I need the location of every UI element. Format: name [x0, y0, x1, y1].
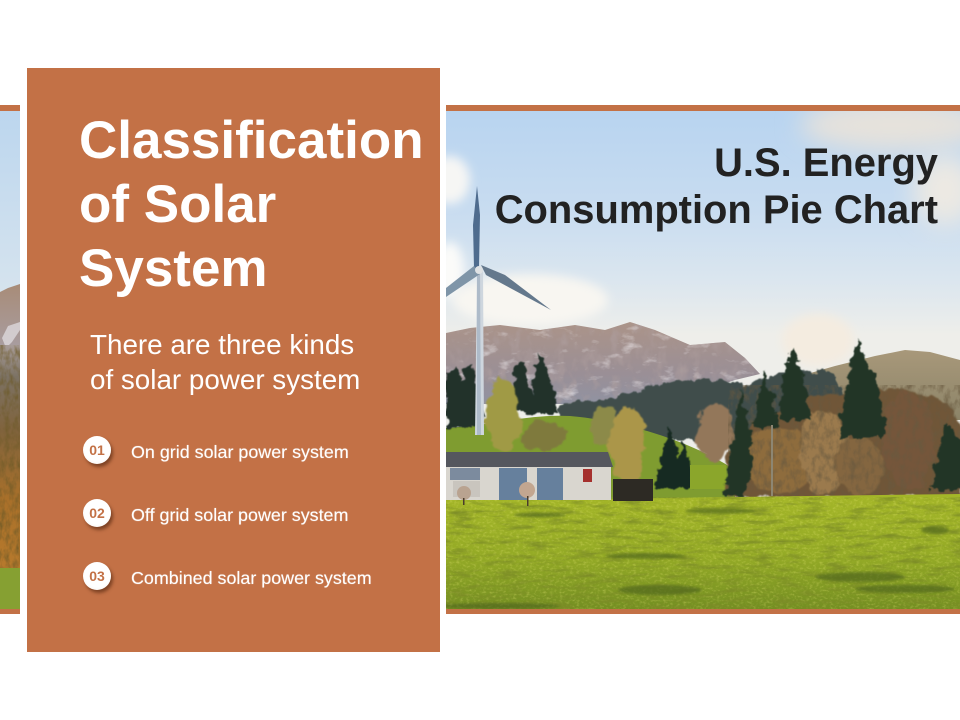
- panel: classification of solar system: [27, 68, 440, 652]
- label 03: Combined solar power system: [131, 568, 372, 588]
- heading: classification of solar system: of Solar: [79, 175, 276, 234]
- snowy mountains: [446, 322, 760, 404]
- green meadow hill: [446, 416, 735, 500]
- left photo strip: [0, 105, 20, 614]
- house: [446, 452, 613, 506]
- title: U.S. energy consumption pie chart: [495, 141, 938, 232]
- heading: classification of solar system: Classification: [79, 111, 424, 170]
- dark conifer cluster: [654, 427, 696, 488]
- light meadow patch: [690, 465, 726, 489]
- badge 02: [83, 499, 111, 527]
- heading: classification of solar system: [79, 111, 424, 298]
- subheading text: [90, 329, 360, 395]
- pale-leaf trees on hill: [486, 379, 734, 483]
- title: U.S. energy consumption pie chart: Consumption Pie Chart: [495, 188, 938, 232]
- list item 01: [83, 436, 349, 469]
- grass field: [446, 494, 960, 609]
- power pole: [771, 425, 773, 496]
- right landscape photo: [446, 105, 960, 614]
- clouds: [430, 99, 960, 366]
- field shadows: [440, 508, 955, 609]
- tall firs: [724, 338, 960, 498]
- heading: classification of solar system: System: [79, 239, 268, 298]
- wind turbine: [446, 186, 551, 435]
- list item 02: [83, 499, 348, 532]
- badge 03: 03: [89, 568, 105, 584]
- title: U.S. energy consumption pie chart: U.S. Energy: [714, 141, 938, 185]
- label 02: Off grid solar power system: [131, 505, 348, 525]
- badge 01: [83, 436, 111, 464]
- subheading text: There are three kinds: [90, 329, 354, 360]
- woodpile: [613, 479, 653, 501]
- left conifers: [446, 352, 560, 428]
- badge 03: [83, 562, 111, 590]
- badge 02: 02: [89, 505, 105, 521]
- badge 01: 01: [89, 442, 105, 458]
- label 01: On grid solar power system: [131, 442, 349, 462]
- subheading text: of solar power system: [90, 364, 360, 394]
- dark forested hill: [560, 370, 850, 440]
- autumn tree belt: [727, 385, 960, 498]
- list item 03: [83, 562, 372, 595]
- right ridge: [800, 350, 960, 420]
